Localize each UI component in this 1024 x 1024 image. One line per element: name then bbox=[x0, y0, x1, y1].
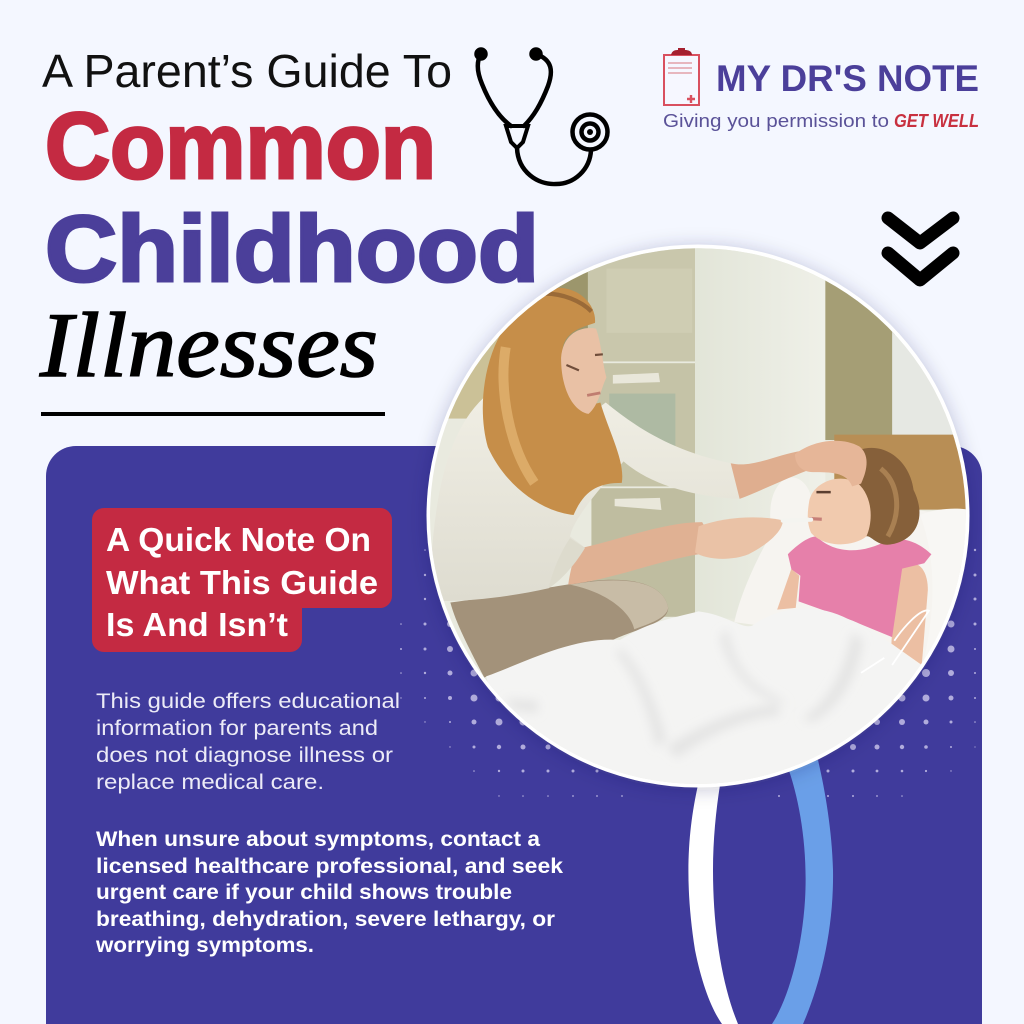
icon: clipboard bbox=[664, 48, 699, 105]
badge shape bbox=[92, 508, 392, 652]
text block: disclaimer: replace medical care. bbox=[96, 771, 324, 794]
panel: quick note bbox=[46, 446, 982, 1024]
room background bbox=[430, 248, 940, 682]
photo: mother checking child's temperature bbox=[420, 240, 980, 811]
title line: a parent's guide to: A Parent’s Guide To bbox=[42, 45, 452, 97]
text block: disclaimer: information for parents and bbox=[96, 717, 378, 740]
title line: illnesses: Illnesses bbox=[39, 294, 378, 396]
text block: urgent care advice bbox=[95, 828, 563, 957]
logo bbox=[663, 48, 979, 131]
mother: face bbox=[561, 328, 606, 414]
note badge bbox=[92, 508, 392, 652]
text block: urgent care advice: urgent care if your child shows trouble bbox=[96, 881, 512, 904]
child: pink shirt bbox=[788, 536, 931, 637]
tagline: Giving you permission to bbox=[663, 111, 889, 131]
text block: disclaimer bbox=[96, 690, 400, 794]
icon: double chevron down bbox=[888, 218, 953, 280]
photo shadow bbox=[426, 246, 970, 790]
child: arms bbox=[891, 563, 928, 665]
child: face bbox=[808, 479, 871, 544]
title bbox=[39, 45, 539, 396]
text block: disclaimer: does not diagnose illness or bbox=[96, 744, 393, 767]
tagline accent: GET WELL bbox=[894, 111, 979, 131]
text block: urgent care advice: worrying symptoms. bbox=[95, 934, 314, 957]
dot pattern bbox=[400, 549, 976, 797]
badge text: A Quick Note On bbox=[106, 521, 371, 558]
mother: neck bbox=[549, 408, 590, 449]
mother: sweater bbox=[432, 398, 701, 601]
pillows bbox=[734, 478, 932, 665]
text block: disclaimer: This guide offers educational bbox=[96, 690, 400, 713]
ribbon: blue bbox=[772, 760, 833, 1024]
thermometer bbox=[783, 520, 811, 521]
text block: urgent care advice: When unsure about symptoms, contact a bbox=[96, 828, 540, 851]
text block: urgent care advice: licensed healthcare professional, and seek bbox=[96, 855, 563, 878]
white ribbon loop bbox=[861, 610, 929, 673]
ribbon: white bbox=[688, 785, 738, 1024]
badge text: Is And Isn’t bbox=[106, 606, 288, 643]
mother: arm to forehead bbox=[731, 451, 813, 499]
icon: stethoscope bbox=[476, 50, 608, 184]
mother: legs bbox=[450, 580, 668, 677]
brand name: MY DR'S NOTE bbox=[716, 58, 979, 99]
title line: childhood: Childhood bbox=[45, 196, 539, 301]
text block: urgent care advice: breathing, dehydration, severe lethargy, or bbox=[96, 908, 555, 931]
title underline bbox=[41, 412, 385, 416]
badge text bbox=[106, 521, 378, 643]
mother: hair bbox=[483, 288, 622, 515]
duvet bbox=[486, 610, 918, 784]
mother: arm with thermometer bbox=[568, 522, 716, 585]
badge text: What This Guide bbox=[106, 564, 378, 601]
child: hair bbox=[852, 448, 919, 545]
title line: common: Common bbox=[45, 93, 436, 198]
